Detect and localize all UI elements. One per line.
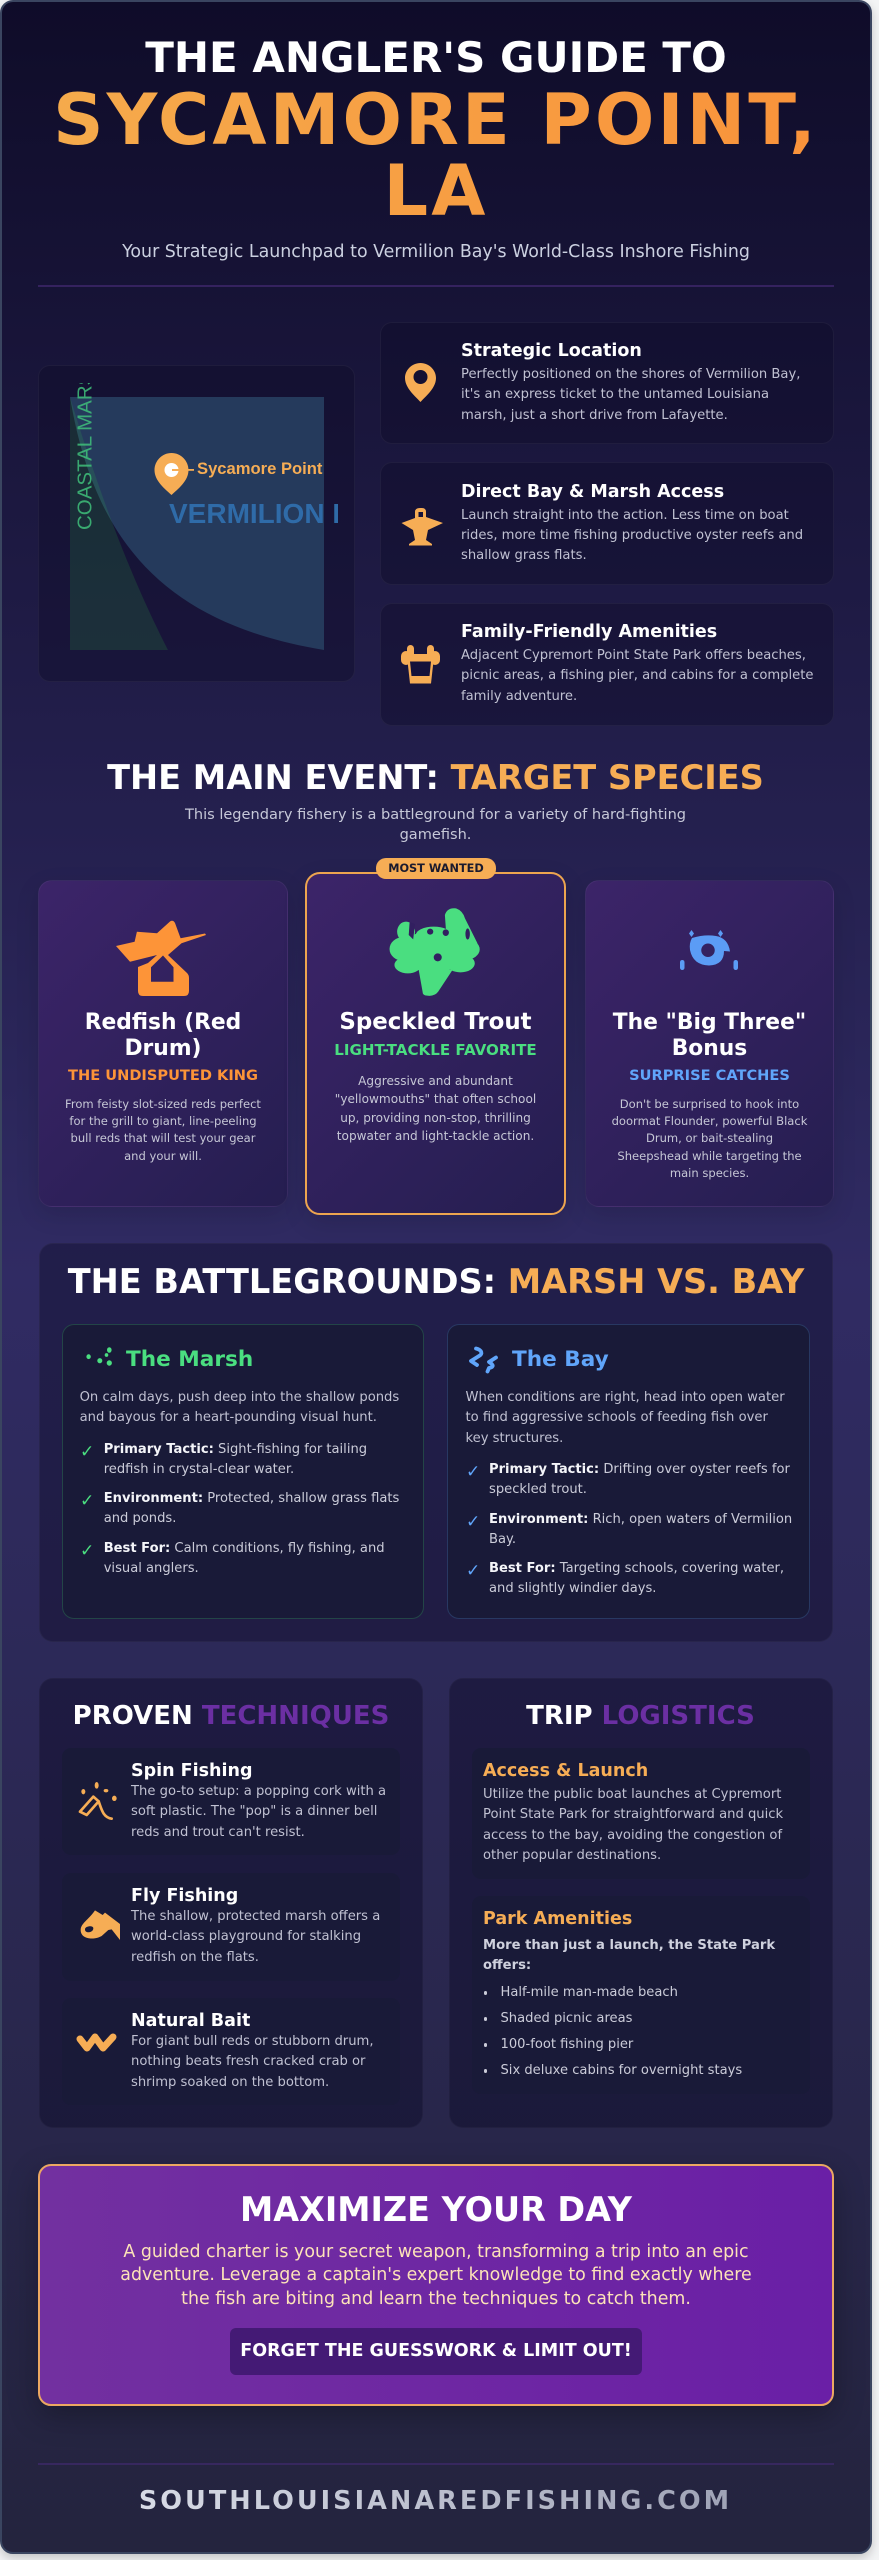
text: spin fishing <box>130 1784 386 1840</box>
icon: natural bait <box>76 2034 116 2052</box>
icon: spin fishing <box>78 1782 117 1820</box>
text: strategic location: it's an express ticket to the untamed Louisiana <box>461 387 769 402</box>
text: park amenities intro <box>483 1938 776 1973</box>
list: park amenities <box>484 1984 742 2078</box>
list: bay checks: Bay. <box>489 1532 516 1547</box>
text: marsh intro: and bayous for a heart-pounding visual hunt. <box>80 1410 377 1425</box>
text: call to action: adventure. Leverage a captain's expert knowledge to find exactly where <box>120 2265 752 2285</box>
heading: battlegrounds: THE BATTLEGROUNDS: MARSH VS. BAY <box>68 1262 804 1301</box>
heading: big three <box>612 1010 806 1061</box>
text: access and launch: other popular destinations. <box>483 1848 661 1863</box>
text: amenities: picnic areas, a fishing pier, and cabins for a complete <box>461 668 814 683</box>
list: bay checks: and slightly windier days. <box>489 1581 656 1596</box>
map of Sycamore Point and Vermilion Bay: Sycamore Point <box>197 459 323 478</box>
text: access and launch: Point State Park for straightforward and quick <box>483 1807 783 1822</box>
list: bay checks: Best For: Targeting schools, covering water, <box>489 1561 784 1576</box>
text: target species intro <box>184 806 686 843</box>
text: call to action <box>120 2242 752 2309</box>
panel: proven techniques <box>39 1678 423 2128</box>
panel: spin fishing <box>62 1748 400 1855</box>
text: amenities: family adventure. <box>461 689 577 704</box>
heading: maximize your day: MAXIMIZE YOUR DAY <box>240 2190 632 2229</box>
panel: strategic location <box>380 322 834 444</box>
text: speckled trout <box>335 1074 536 1143</box>
text: spin fishing: The go-to setup: a popping cork with a <box>131 1784 386 1799</box>
icon: fly fishing <box>80 1910 120 1940</box>
icon: map pin <box>405 363 436 402</box>
heading: redfish <box>85 1010 241 1061</box>
title: Sycamore Point, LA <box>38 85 834 227</box>
list: marsh checks: visual anglers. <box>104 1561 199 1576</box>
text: natural bait: For giant bull reds or stubborn drum, <box>131 2034 374 2049</box>
heading: strategic location: Strategic Location <box>461 341 642 361</box>
panel: the bay <box>447 1324 810 1619</box>
panel: natural bait <box>62 1998 400 2105</box>
list: park amenities: Half-mile man-made beach <box>500 1984 678 2000</box>
text: redfish: for the grill to giant, line-peeling <box>69 1114 257 1128</box>
icon: speckled trout <box>390 908 480 996</box>
text: big three: Don't be surprised to hook into <box>620 1096 799 1110</box>
footer: website: SOUTHLOUISIANAREDFISHING.COM <box>139 2486 732 2516</box>
list: bay checks: Primary Tactic: Drifting over oyster reefs for <box>489 1462 790 1477</box>
panel: redfish <box>38 880 288 1207</box>
text: direct access <box>461 508 803 563</box>
text: big three <box>612 1096 808 1180</box>
heading: proven techniques: PROVEN TECHNIQUES <box>73 1700 389 1730</box>
list: marsh checks: ✓ <box>80 1442 94 1462</box>
panel: access and launch <box>472 1748 810 1879</box>
panel: call to action <box>38 2164 834 2406</box>
list: marsh checks: ✓ <box>80 1491 94 1511</box>
text: direct access: shallow grass flats. <box>461 548 587 563</box>
panel: speckled trout <box>305 872 566 1215</box>
panel: map <box>38 365 355 682</box>
text: spin fishing: soft plastic. The "pop" is a dinner bell <box>131 1804 377 1819</box>
text: big three: main species. <box>670 1166 749 1180</box>
label: the undisputed king: THE UNDISPUTED KING <box>68 1066 258 1084</box>
heading: redfish: Drum) <box>124 1036 202 1061</box>
heading: big three: Bonus <box>672 1036 747 1061</box>
text: natural bait: nothing beats fresh cracked crab or <box>131 2054 365 2069</box>
heading: trip logistics: TRIP LOGISTICS <box>526 1700 755 1730</box>
list: marsh checks: Primary Tactic: Sight-fishing for tailing <box>104 1442 367 1457</box>
panel: big three <box>585 880 834 1207</box>
heading: speckled trout: Speckled Trout <box>339 1008 532 1034</box>
text: marsh intro: On calm days, push deep into the shallow ponds <box>80 1390 399 1405</box>
subtitle: Your Strategic Launchpad to Vermilion Bay's World-Class Inshore Fishing <box>122 242 750 262</box>
text: bay intro: When conditions are right, head into open water <box>466 1390 785 1405</box>
text: speckled trout: up, providing non-stop, thrilling <box>340 1111 531 1125</box>
icon: redfish <box>116 920 206 996</box>
list: park amenities: Shaded picnic areas <box>500 2010 632 2026</box>
title: Sycamore Point, LA: SYCAMORE POINT, <box>53 79 819 161</box>
label: surprise catches: SURPRISE CATCHES <box>629 1066 790 1084</box>
text: natural bait <box>131 2034 374 2090</box>
text: strategic location: Perfectly positioned on the shores of Vermilion Bay, <box>461 367 800 382</box>
icon: anchor <box>402 508 443 546</box>
text: park amenities intro: More than just a launch, the State Park <box>483 1938 775 1953</box>
text: amenities: Adjacent Cypremort Point State Park offers beaches, <box>461 648 806 663</box>
text: fly fishing: The shallow, protected marsh offers a <box>131 1909 380 1924</box>
heading: big three: The "Big Three" <box>613 1010 806 1034</box>
text: spin fishing: reds and trout can't resist. <box>131 1825 305 1840</box>
text: bay intro <box>466 1390 785 1446</box>
panel: park amenities <box>472 1896 810 2094</box>
list: bay checks: ✓ <box>466 1561 480 1581</box>
text: fly fishing <box>130 1909 380 1965</box>
title line one: THE ANGLER'S GUIDE TO <box>145 33 727 82</box>
heading: the bay: The Bay <box>512 1346 609 1372</box>
text: big three: Drum, or bait-stealing <box>646 1131 773 1145</box>
icon: marsh <box>86 1347 112 1366</box>
list: marsh checks: Environment: Protected, shallow grass flats <box>104 1491 399 1506</box>
text: redfish: From feisty slot-sized reds perfect <box>65 1096 261 1110</box>
text: redfish: and your will. <box>124 1149 202 1163</box>
text: speckled trout: Aggressive and abundant <box>358 1074 513 1088</box>
label: light-tackle favorite: LIGHT-TACKLE FAVORITE <box>334 1040 537 1058</box>
list: bay checks: ✓ <box>466 1512 480 1532</box>
text: bay intro: to find aggressive schools of feeding fish over <box>466 1410 768 1425</box>
panel: trip logistics <box>448 1678 832 2128</box>
text: park amenities intro: offers: <box>483 1958 531 1973</box>
list: marsh checks: ✓ <box>80 1541 94 1561</box>
list: marsh checks: and ponds. <box>104 1511 176 1526</box>
text: big three: Sheepshead while targeting the <box>617 1149 802 1163</box>
heading: access and launch: Access & Launch <box>483 1761 648 1781</box>
button: forget the guesswork: FORGET THE GUESSWORK & LIMIT OUT! <box>240 2341 632 2361</box>
text: access and launch: Utilize the public boat launches at Cypremort <box>483 1787 781 1802</box>
list: bay checks: Environment: Rich, open waters of Vermilion <box>489 1512 792 1526</box>
icon: big three <box>680 930 738 970</box>
text: direct access: Launch straight into the action. Less time on boat <box>461 508 789 522</box>
text: natural bait: shrimp soaked on the bottom. <box>131 2075 329 2090</box>
text: strategic location: marsh, just a short drive from Lafayette. <box>461 408 728 423</box>
text: amenities <box>461 648 814 704</box>
heading: amenities: Family-Friendly Amenities <box>461 622 717 642</box>
heading: spin fishing: Spin Fishing <box>131 1761 252 1781</box>
text: strategic location <box>461 367 800 423</box>
panel: fly fishing <box>62 1873 400 1981</box>
text: speckled trout: topwater and light-tackle action. <box>337 1129 534 1143</box>
list: bay checks: speckled trout. <box>489 1482 587 1497</box>
heading: fly fishing: Fly Fishing <box>131 1886 238 1906</box>
text: fly fishing: redfish on the flats. <box>131 1950 259 1965</box>
text: call to action: the fish are biting and learn the techniques to catch them. <box>181 2289 691 2309</box>
badge: most wanted <box>376 858 496 879</box>
text: call to action: A guided charter is your secret weapon, transforming a trip into an epic <box>123 2242 749 2262</box>
icon: bay <box>469 1346 498 1374</box>
map of Sycamore Point and Vermilion Bay <box>70 383 338 650</box>
text: target species intro: This legendary fishery is a battleground for a variety of hard-fighting <box>185 806 686 823</box>
list: bay checks: ✓ <box>466 1462 480 1482</box>
badge: most wanted: MOST WANTED <box>388 862 484 875</box>
heading: target species: THE MAIN EVENT: TARGET SPECIES <box>107 758 764 797</box>
panel: amenities <box>380 603 834 726</box>
list: marsh checks <box>80 1442 399 1576</box>
heading: direct access: Direct Bay & Marsh Access <box>461 482 724 502</box>
list: marsh checks: redfish in crystal-clear water. <box>104 1462 294 1477</box>
title: Sycamore Point, LA: LA <box>384 150 488 232</box>
text: marsh intro <box>80 1390 399 1425</box>
heading: the marsh: The Marsh <box>126 1346 253 1372</box>
text: access and launch <box>483 1787 783 1863</box>
text: fly fishing: world-class playground for stalking <box>131 1929 361 1944</box>
panel: direct access <box>380 462 834 585</box>
list: bay checks <box>466 1462 792 1596</box>
text: direct access: rides, more time fishing productive oyster reefs and <box>461 528 803 543</box>
button: forget the guesswork <box>230 2328 642 2375</box>
text: bay intro: key structures. <box>466 1431 563 1446</box>
text: target species intro: gamefish. <box>400 826 471 843</box>
panel: battlegrounds <box>39 1243 833 1642</box>
text: big three: doormat Flounder, powerful Black <box>612 1114 807 1128</box>
text: redfish <box>65 1096 261 1163</box>
heading: park amenities: Park Amenities <box>483 1909 632 1929</box>
heading: redfish: Redfish (Red <box>85 1010 241 1034</box>
panel: the marsh <box>62 1324 424 1619</box>
list: park amenities: 100-foot fishing pier <box>500 2037 633 2052</box>
icon: cooler <box>401 645 440 684</box>
text: redfish: bull reds that will test your gear <box>71 1131 255 1145</box>
heading: natural bait: Natural Bait <box>131 2011 250 2031</box>
text: speckled trout: "yellowmouths" that often school <box>335 1092 536 1106</box>
text: access and launch: access to the bay, avoiding the congestion of <box>483 1828 782 1843</box>
list: marsh checks: Best For: Calm conditions, fly fishing, and <box>104 1541 385 1556</box>
list: park amenities: Six deluxe cabins for overnight stays <box>500 2063 742 2078</box>
